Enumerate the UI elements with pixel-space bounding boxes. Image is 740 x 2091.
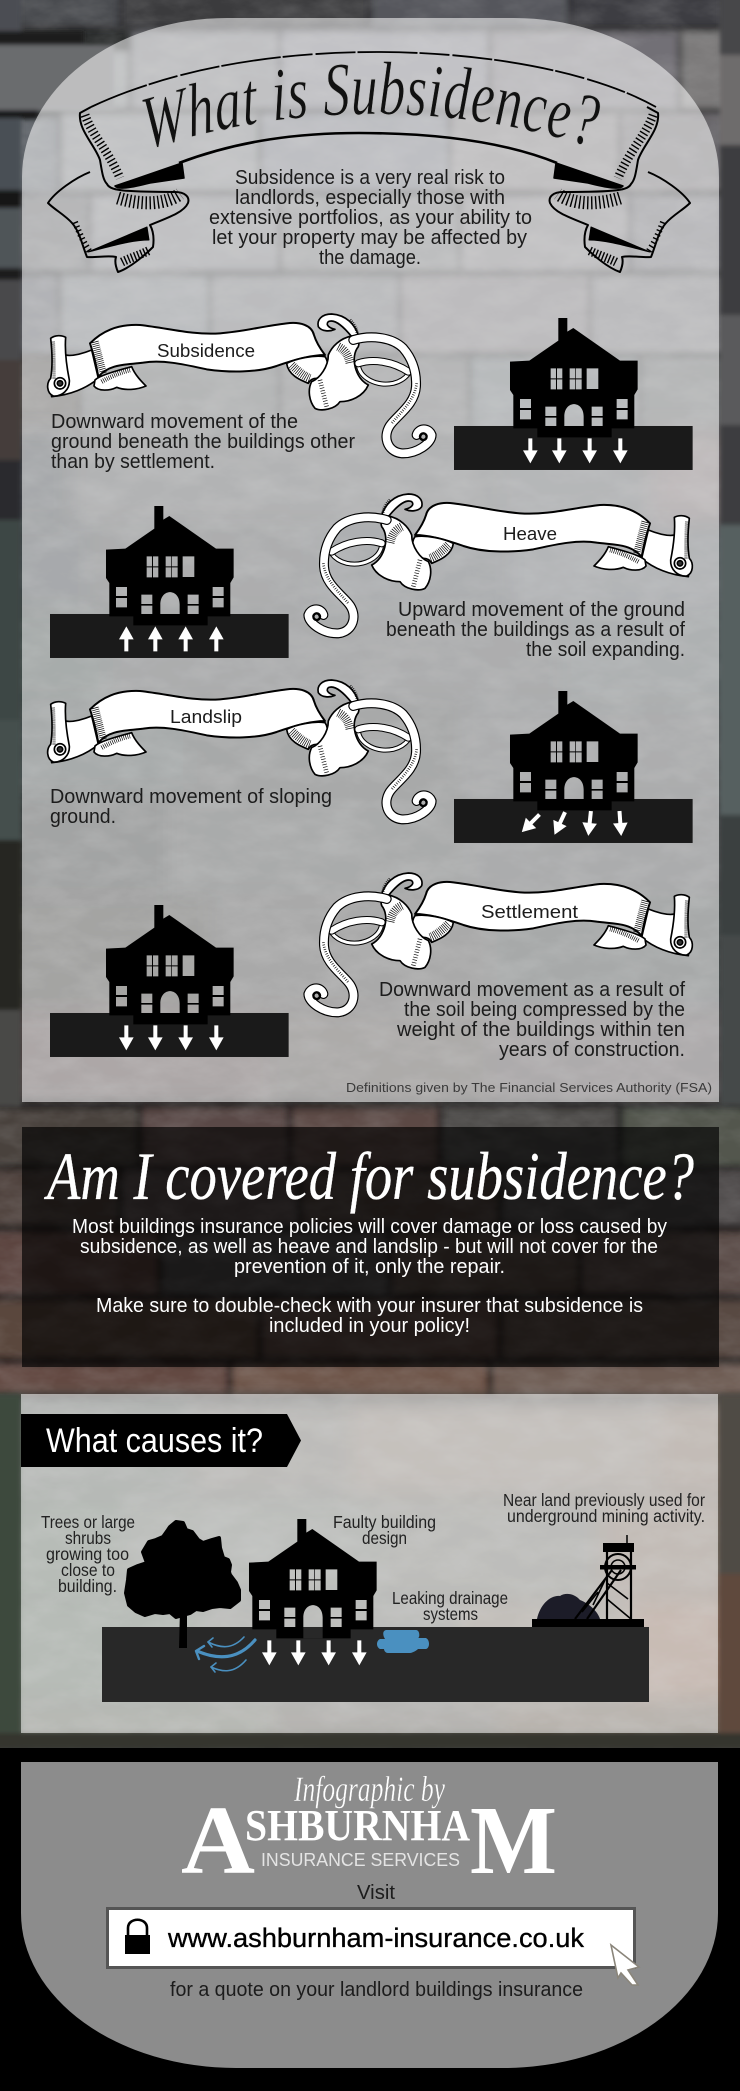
footer band: [0, 1748, 740, 2091]
ribbon label: settlement: Settlement: [481, 901, 578, 922]
logo: ashburnham: INSURANCE SERVICES: [261, 1850, 460, 1870]
icon: house settling: [50, 905, 289, 1057]
icon: padlock: [125, 1920, 150, 1954]
caption: trees: growing too: [46, 1544, 129, 1564]
logo: ashburnham: [181, 1787, 557, 1895]
ribbon: settlement: [308, 873, 692, 1012]
definition: settlement: [50, 873, 692, 1061]
caption: trees: [41, 1512, 135, 1596]
ribbon label: heave: Heave: [503, 523, 557, 544]
caption: faulty design: [333, 1512, 436, 1548]
description: subsidence: ground beneath the buildings other: [51, 431, 355, 453]
panel: what causes it: [21, 1394, 718, 1733]
ribbon: subsidence: [48, 314, 432, 453]
description: heave: the soil expanding.: [526, 639, 685, 661]
logo: ashburnham: A: [181, 1787, 255, 1895]
description: heave: beneath the buildings as a result of: [386, 619, 685, 641]
icon: cursor: [611, 1945, 639, 1985]
source note: Definitions given by The Financial Services Authority (FSA): [346, 1080, 712, 1095]
icon: house with faulty design: [249, 1519, 377, 1665]
caption: trees: Trees or large: [41, 1512, 135, 1532]
icon: mine headframe: [532, 1535, 644, 1627]
description: settlement: weight of the buildings within ten: [396, 1019, 685, 1041]
caption: trees: close to: [61, 1560, 115, 1580]
definition: subsidence: [48, 314, 693, 473]
logo: ashburnham: M: [470, 1787, 557, 1895]
description: heave: [386, 599, 685, 661]
caption: leaking drainage: systems: [423, 1604, 478, 1624]
caption: trees: building.: [58, 1576, 117, 1596]
caption: mining: Near land previously used for: [503, 1490, 705, 1510]
body text: coverage: prevention of it, only the repair.: [234, 1256, 505, 1278]
heading ribbon: what causes it: [21, 1414, 301, 1467]
body text: coverage: Most buildings insurance policies will cover damage or loss caused by: [72, 1216, 667, 1238]
caption: faulty design: design: [362, 1528, 407, 1548]
url: www.ashburnham-insurance.co.uk: [167, 1923, 584, 1953]
description: landslip: Downward movement of sloping: [50, 786, 332, 808]
url box: [108, 1908, 639, 1985]
icon: tree: [126, 1522, 239, 1648]
caption: mining: [503, 1490, 705, 1526]
icon: house rising: [50, 506, 289, 658]
text: visit: Visit: [357, 1882, 395, 1904]
description: landslip: [50, 786, 332, 828]
caption: trees: shrubs: [65, 1528, 111, 1548]
logo: ashburnham: SHBURNHA: [245, 1801, 470, 1850]
panel: what is subsidence: [22, 18, 719, 1102]
description: settlement: the soil being compressed by the: [404, 999, 685, 1021]
icon: leaking water: [377, 1630, 429, 1653]
description: settlement: years of construction.: [499, 1039, 685, 1061]
body text: coverage: Make sure to double-check with your insurer that subsidence is: [96, 1295, 643, 1317]
intro text: [209, 167, 532, 269]
icon: house sliding: [454, 691, 693, 843]
ribbon: heave: [308, 494, 692, 633]
description: subsidence: [51, 411, 355, 473]
icon: tree root water arrows: [196, 1637, 255, 1672]
text: quote: for a quote on your landlord buildings insurance: [170, 1979, 583, 2001]
description: subsidence: Downward movement of the: [51, 411, 298, 433]
ribbon label: landslip: Landslip: [170, 706, 242, 727]
caption: faulty design: Faulty building: [333, 1512, 436, 1532]
description: heave: Upward movement of the ground: [398, 599, 685, 621]
ground: [102, 1627, 649, 1702]
definition: landslip: [48, 680, 693, 843]
description: landslip: ground.: [50, 806, 116, 828]
banner right tail: [550, 107, 690, 272]
banner left tail: [48, 107, 188, 272]
body text: coverage: included in your policy!: [269, 1315, 470, 1337]
title banner: [48, 52, 690, 272]
description: settlement: Downward movement as a result of: [379, 979, 685, 1001]
ribbon: landslip: [48, 680, 432, 819]
description: subsidence: than by settlement.: [51, 451, 215, 473]
caption: leaking drainage: [392, 1588, 508, 1624]
icon: house sinking: [454, 318, 693, 470]
intro text: the damage.: [319, 247, 421, 269]
definition: heave: [50, 494, 692, 661]
intro text: landlords, especially those with: [235, 187, 505, 209]
body text: coverage: [72, 1216, 667, 1337]
caption: leaking drainage: Leaking drainage: [392, 1588, 508, 1608]
body text: coverage: subsidence, as well as heave and landslip - but will not cover for the: [80, 1236, 658, 1258]
caption: mining: underground mining activity.: [507, 1506, 705, 1526]
credit: infographic by: Infographic by: [293, 1769, 445, 1809]
panel: footer: [21, 1762, 718, 2068]
intro text: Subsidence is a very real risk to: [235, 167, 505, 189]
ribbon label: subsidence: Subsidence: [157, 340, 255, 361]
title: What is Subsidence?: [142, 61, 600, 148]
description: settlement: [379, 979, 685, 1061]
intro text: let your property may be affected by: [212, 227, 527, 249]
intro text: extensive portfolios, as your ability to: [209, 207, 532, 229]
heading ribbon: what causes it: What causes it?: [46, 1422, 263, 1460]
panel: am I covered: [22, 1127, 719, 1367]
